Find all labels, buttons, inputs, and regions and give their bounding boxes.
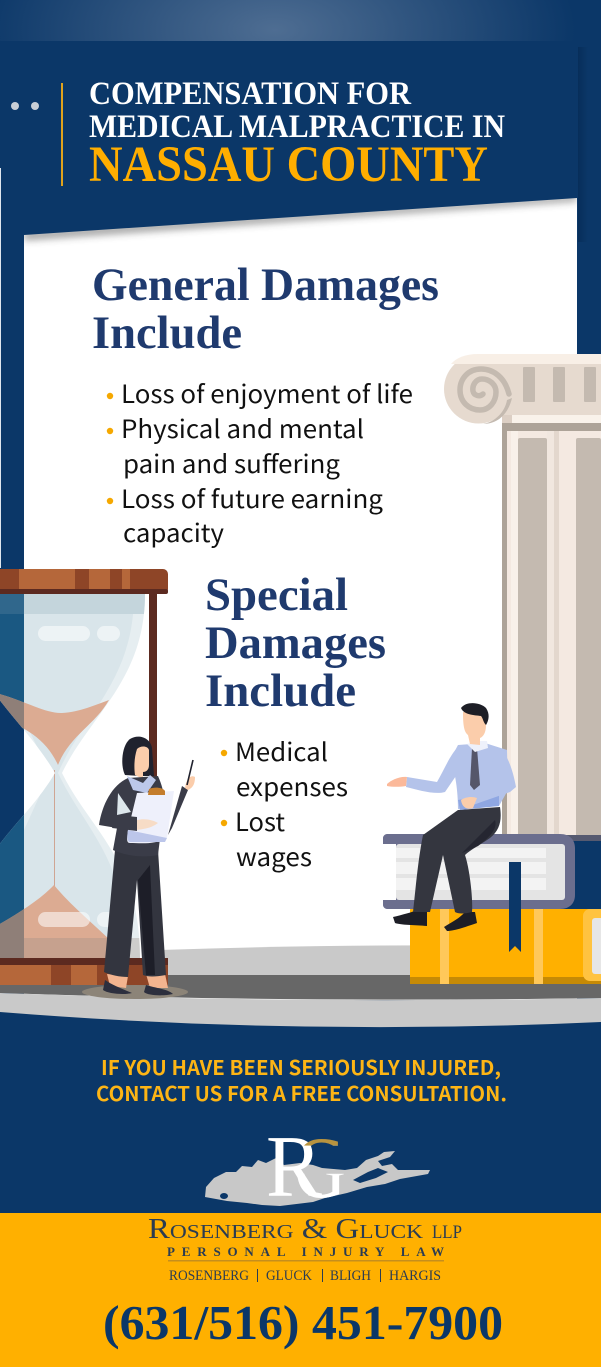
heading: special damages: Damages <box>205 617 386 669</box>
title: NASSAU COUNTY <box>89 137 488 193</box>
tie <box>470 748 480 790</box>
list: general damages: Loss of enjoyment of life <box>121 375 413 411</box>
outstretched arm <box>406 747 460 793</box>
top glow <box>0 0 601 41</box>
heading: special damages <box>205 569 386 717</box>
decorative dots <box>11 102 39 110</box>
header panel <box>11 41 577 235</box>
bay <box>353 1168 388 1183</box>
list: special damages: expenses <box>236 768 348 804</box>
frame post <box>149 594 157 962</box>
list: special damages: Medical <box>235 733 328 769</box>
white content panel <box>24 190 577 1000</box>
hand on clipboard <box>137 819 158 830</box>
heading: special damages: Special <box>205 569 348 621</box>
contact band <box>0 1213 601 1368</box>
head <box>463 712 486 745</box>
title: MEDICAL MALPRACTICE IN <box>89 109 505 145</box>
frame base <box>0 958 168 965</box>
ankles <box>107 974 168 988</box>
face <box>134 746 149 779</box>
yellow book <box>410 905 601 984</box>
clipboard <box>127 791 174 843</box>
illustration: seated man <box>387 703 516 931</box>
sand stream <box>54 770 55 888</box>
call to action: IF YOU HAVE BEEN SERIOUSLY INJURED, <box>101 1052 501 1081</box>
firm name: LLP <box>432 1222 462 1243</box>
pointer <box>187 760 193 785</box>
list: general damages: pain and suffering <box>123 445 340 481</box>
list: special damages: Lost <box>235 803 286 839</box>
gap between arm and torso <box>117 793 131 815</box>
monogram G: G <box>294 1120 346 1217</box>
right arm <box>464 747 516 806</box>
header shadow <box>24 195 577 240</box>
trousers <box>104 850 166 977</box>
practice tagline: PERSONAL INJURY LAW <box>167 1244 444 1259</box>
navy book cover <box>560 835 601 909</box>
glass <box>0 594 145 958</box>
lake <box>220 1193 228 1199</box>
collar <box>127 775 156 793</box>
outstretched hand <box>387 777 407 787</box>
partner names: HARGIS <box>389 1268 441 1284</box>
hair <box>461 703 489 725</box>
bookmark <box>509 862 521 952</box>
list: special damages: wages <box>236 838 312 874</box>
sand seen over navy <box>0 694 24 958</box>
sand top <box>0 687 109 765</box>
title <box>89 76 505 193</box>
frame top <box>0 569 168 594</box>
hand on lap <box>461 797 477 809</box>
jacket <box>99 776 164 856</box>
raised arm <box>168 786 188 835</box>
sleeve cuff over clipboard <box>112 815 137 831</box>
call to action <box>96 1052 507 1107</box>
heading: special damages: Include <box>205 665 356 717</box>
torso <box>450 743 508 809</box>
sand bottom <box>0 885 115 958</box>
bottom edge <box>0 1367 601 1368</box>
partner names: BLIGH <box>330 1268 371 1284</box>
glass over navy strip <box>0 614 24 924</box>
header right shadow <box>578 47 588 242</box>
monogram R: R <box>266 1119 322 1216</box>
list: general damages: Physical and mental <box>121 410 364 446</box>
ground <box>0 945 601 1027</box>
column capital <box>444 354 513 424</box>
grey book <box>383 834 575 909</box>
partner names: ROSENBERG <box>169 1268 249 1284</box>
trousers <box>413 807 501 914</box>
partner names: GLUCK <box>266 1268 312 1284</box>
title: COMPENSATION FOR <box>89 76 412 112</box>
inner glass <box>24 614 133 937</box>
firm name: Rosenberg & Gluck <box>148 1214 424 1245</box>
waist fold <box>458 793 499 810</box>
collar <box>467 741 488 752</box>
shoes <box>393 910 427 926</box>
illustration: hourglass <box>0 569 168 985</box>
heading: general damages: General Damages <box>92 259 439 311</box>
island silhouette <box>205 1151 430 1206</box>
column shaft <box>502 423 601 838</box>
heading: general damages: Include <box>92 307 242 359</box>
hair <box>122 737 154 776</box>
illustration: stacked books <box>383 834 601 984</box>
call to action: CONTACT US FOR A FREE CONSULTATION. <box>96 1078 507 1107</box>
header accent line <box>61 83 63 186</box>
volute spiral <box>460 369 509 410</box>
phone number: (631/516) 451-7900 <box>103 1295 503 1350</box>
logo: Long Island map with monogram <box>205 1119 430 1217</box>
shoes <box>103 980 132 994</box>
illustration: woman presenting <box>82 737 195 999</box>
list: general damages: Loss of future earning <box>121 480 383 516</box>
heading: general damages <box>92 259 439 359</box>
list: special damages <box>221 733 348 874</box>
list: general damages <box>107 375 413 550</box>
list: general damages: capacity <box>123 514 224 550</box>
partner names <box>169 1268 441 1284</box>
illustration: column <box>444 354 601 838</box>
floor shadow <box>82 985 188 999</box>
left edge sliver <box>0 168 1 568</box>
glass highlights <box>38 626 120 927</box>
